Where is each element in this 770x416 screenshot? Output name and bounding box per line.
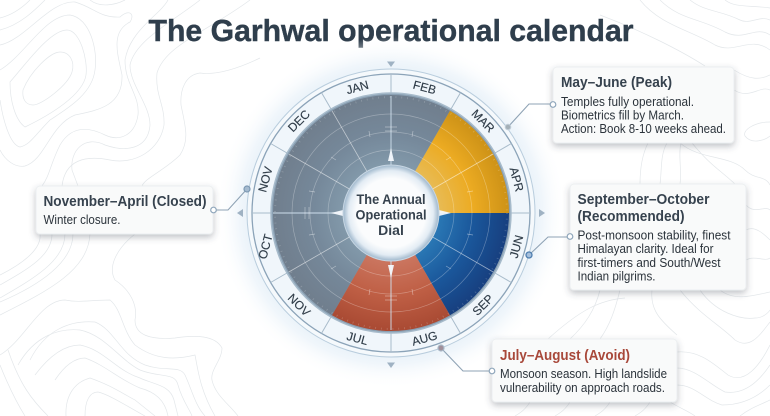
card: November–April (Closed): November–April (Closed) bbox=[44, 194, 207, 210]
month labels: JAN bbox=[345, 78, 370, 97]
card: May–June (Peak) bbox=[550, 67, 734, 143]
connector: May–June bbox=[505, 104, 553, 130]
month labels: JUL bbox=[345, 329, 370, 348]
hub: the annual operational dial: Dial bbox=[378, 222, 404, 238]
hub: the annual operational dial: Operational bbox=[356, 206, 426, 222]
hub: the annual operational dial: The Annual bbox=[356, 191, 426, 207]
wedge: closed, grey bbox=[273, 95, 450, 315]
month labels: APR bbox=[507, 166, 527, 193]
wedge: peak, amber bbox=[391, 111, 509, 213]
month labels: AUG bbox=[410, 328, 439, 349]
card: May–June (Peak): Biometrics fill by March. bbox=[561, 108, 684, 122]
card: July–August (Avoid) bbox=[489, 339, 677, 402]
dial rings and spokes bbox=[273, 96, 507, 330]
month labels: MAR bbox=[469, 107, 498, 136]
card: September–October (Recommended): (Recommended) bbox=[578, 209, 685, 225]
month labels: JUN bbox=[507, 234, 526, 260]
month labels: OCT bbox=[255, 232, 276, 261]
annual operational dial bbox=[215, 37, 567, 389]
wedge: recommended, blue bbox=[391, 213, 509, 315]
card: September–October (Recommended) bbox=[567, 184, 746, 290]
card: July–August (Avoid): July–August (Avoid) bbox=[500, 348, 630, 364]
month labels: DEC bbox=[285, 107, 313, 135]
card: September–October (Recommended): first-timers and South/West bbox=[578, 256, 721, 270]
title: The Garhwal operational calendar bbox=[148, 13, 634, 48]
outer thin ring bbox=[247, 69, 535, 357]
card: September–October (Recommended): Indian pilgrims. bbox=[578, 270, 656, 284]
connector: November–April bbox=[213, 186, 250, 210]
month band bbox=[252, 74, 530, 352]
connector: July–August bbox=[438, 345, 492, 371]
card: November–April (Closed) bbox=[36, 186, 216, 234]
card: July–August (Avoid): Monsoon season. High landslide bbox=[500, 367, 667, 381]
wedge: avoid, red bbox=[332, 213, 450, 331]
card: November–April (Closed): Winter closure. bbox=[44, 213, 120, 227]
card: July–August (Avoid): vulnerability on approach roads. bbox=[500, 381, 665, 395]
month labels: NOV bbox=[255, 165, 276, 194]
month labels: NOV bbox=[285, 291, 313, 319]
card: September–October (Recommended): Himalayan clarity. Ideal for bbox=[578, 242, 714, 256]
month labels: FEB bbox=[412, 78, 438, 97]
card: May–June (Peak): May–June (Peak) bbox=[561, 75, 672, 91]
month labels bbox=[255, 78, 527, 349]
card: September–October (Recommended): September–October bbox=[578, 192, 710, 208]
band separators bbox=[252, 74, 530, 352]
card: May–June (Peak): Action: Book 8-10 weeks ahead. bbox=[561, 122, 726, 136]
card: September–October (Recommended): Post-monsoon stability, finest bbox=[578, 228, 731, 242]
hub: the annual operational dial bbox=[343, 165, 439, 261]
compass markers bbox=[237, 62, 545, 368]
connector: September–October bbox=[526, 237, 570, 258]
card: May–June (Peak): Temples fully operational. bbox=[561, 95, 694, 109]
month labels: SEP bbox=[470, 292, 496, 318]
